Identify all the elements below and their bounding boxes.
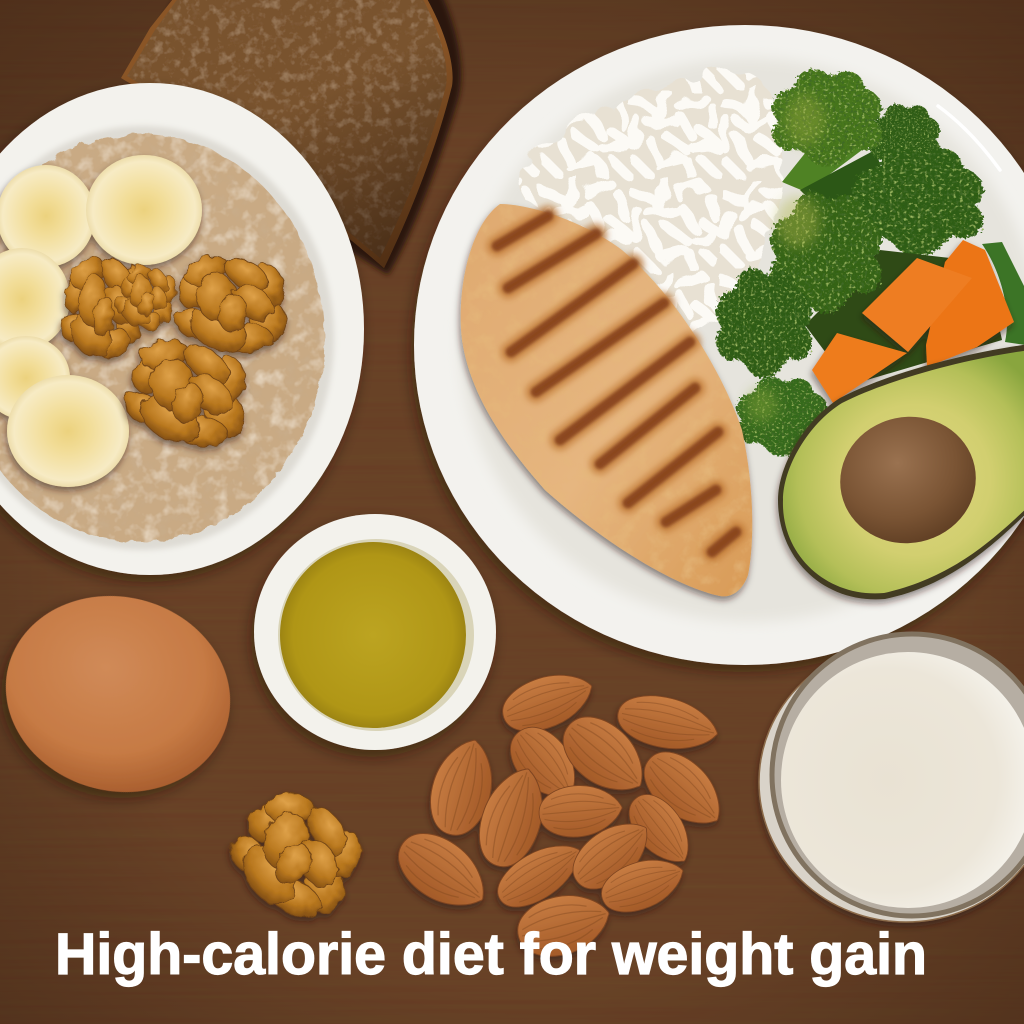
bread crumb	[127, 0, 447, 258]
olive oil	[280, 542, 466, 728]
avocado pit	[828, 404, 988, 556]
milk	[781, 652, 1024, 908]
stem shadow	[800, 150, 900, 240]
carrots	[812, 240, 1014, 403]
bowl rim	[0, 83, 364, 575]
dark gap around carrots	[805, 250, 1002, 385]
floret top highlight	[785, 94, 825, 146]
floret back	[870, 104, 940, 170]
oil bowl inner shade	[278, 539, 474, 731]
grill marks	[497, 216, 736, 552]
green bean behind carrots	[982, 242, 1024, 345]
bread crust	[121, 0, 453, 268]
bread shading	[121, 0, 453, 268]
oil bowl body	[254, 514, 496, 750]
plate base	[414, 25, 1024, 665]
glass body	[759, 642, 1024, 922]
grilled chicken breast	[461, 204, 752, 596]
avocado flesh	[783, 350, 1024, 593]
plate inner well	[460, 58, 1024, 622]
banana slices	[0, 155, 202, 487]
bowl inner shade	[0, 126, 334, 550]
walnuts on oatmeal	[51, 243, 302, 467]
broccoli stem top	[782, 122, 862, 192]
broccoli	[716, 69, 1002, 456]
glass rim	[772, 634, 1024, 916]
floret center highlight	[776, 196, 820, 248]
title: High-calorie diet for weight gain	[55, 922, 927, 987]
oatmeal	[0, 134, 324, 542]
avocado	[778, 344, 1024, 599]
floret low	[737, 377, 827, 456]
walnut	[207, 767, 390, 948]
floret center	[771, 192, 881, 313]
floret right	[853, 146, 983, 256]
glass of milk	[759, 634, 1024, 922]
almonds pile	[386, 662, 735, 965]
main plate	[414, 25, 1024, 665]
grill glow	[497, 216, 736, 552]
olive oil bowl	[254, 514, 496, 750]
floret top	[772, 69, 882, 166]
bread slice	[121, 0, 461, 275]
left bowl	[0, 83, 364, 575]
plate rim highlight	[938, 106, 1000, 170]
rice	[522, 71, 782, 335]
bread shadow side	[130, 0, 461, 275]
avocado skin	[778, 344, 1024, 599]
egg	[0, 573, 251, 815]
floret left	[716, 268, 812, 378]
floret low highlight	[746, 387, 778, 423]
